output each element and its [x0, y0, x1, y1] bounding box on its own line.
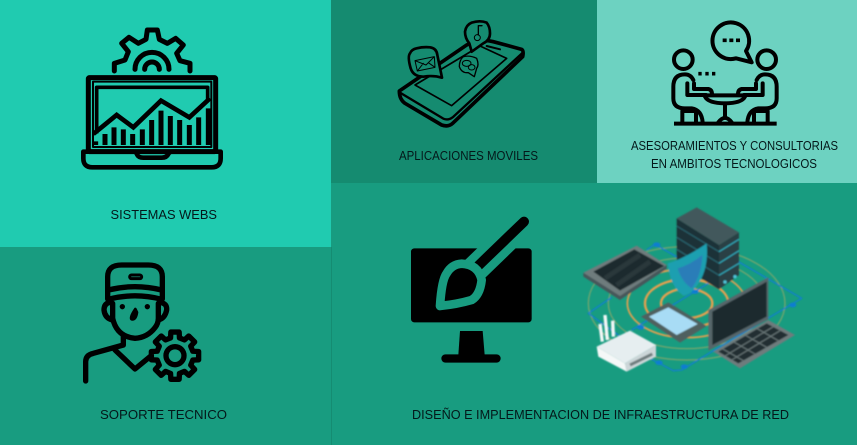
- shield: [668, 243, 707, 296]
- router: [597, 315, 656, 372]
- icon: monitor with paintbrush: [411, 222, 532, 363]
- icon: two people in consultation: [673, 22, 777, 124]
- icon: mobile phone with message bubbles: [399, 21, 523, 126]
- label: diseno e implementacion: DISEÑO E IMPLEMENTACION DE INFRAESTRUCTURA DE RED: [412, 407, 789, 422]
- label: aplicaciones moviles: APLICACIONES MOVILES: [399, 148, 538, 163]
- illustration: network infrastructure: [583, 207, 802, 372]
- label: soporte tecnico: SOPORTE TECNICO: [100, 407, 227, 422]
- label: sistemas webs: SISTEMAS WEBS: [110, 207, 217, 222]
- panel: soporte tecnico: [0, 247, 332, 445]
- smartphone: [641, 302, 707, 343]
- panel: sistemas webs: [0, 0, 331, 247]
- panel: asesoramientos: [597, 0, 857, 183]
- icon: laptop with gear and chart: [83, 30, 221, 167]
- panel: infraestructura de red: [332, 183, 857, 445]
- icon: technician with gear: [86, 265, 199, 381]
- label: asesoramientos y consultorias: EN AMBITOS TECNOLOGICOS: [651, 156, 817, 171]
- laptop: [708, 277, 795, 368]
- label: asesoramientos y consultorias: [631, 138, 838, 171]
- panel: aplicaciones moviles: [331, 0, 597, 183]
- tablet: [583, 246, 667, 300]
- server: [677, 207, 739, 289]
